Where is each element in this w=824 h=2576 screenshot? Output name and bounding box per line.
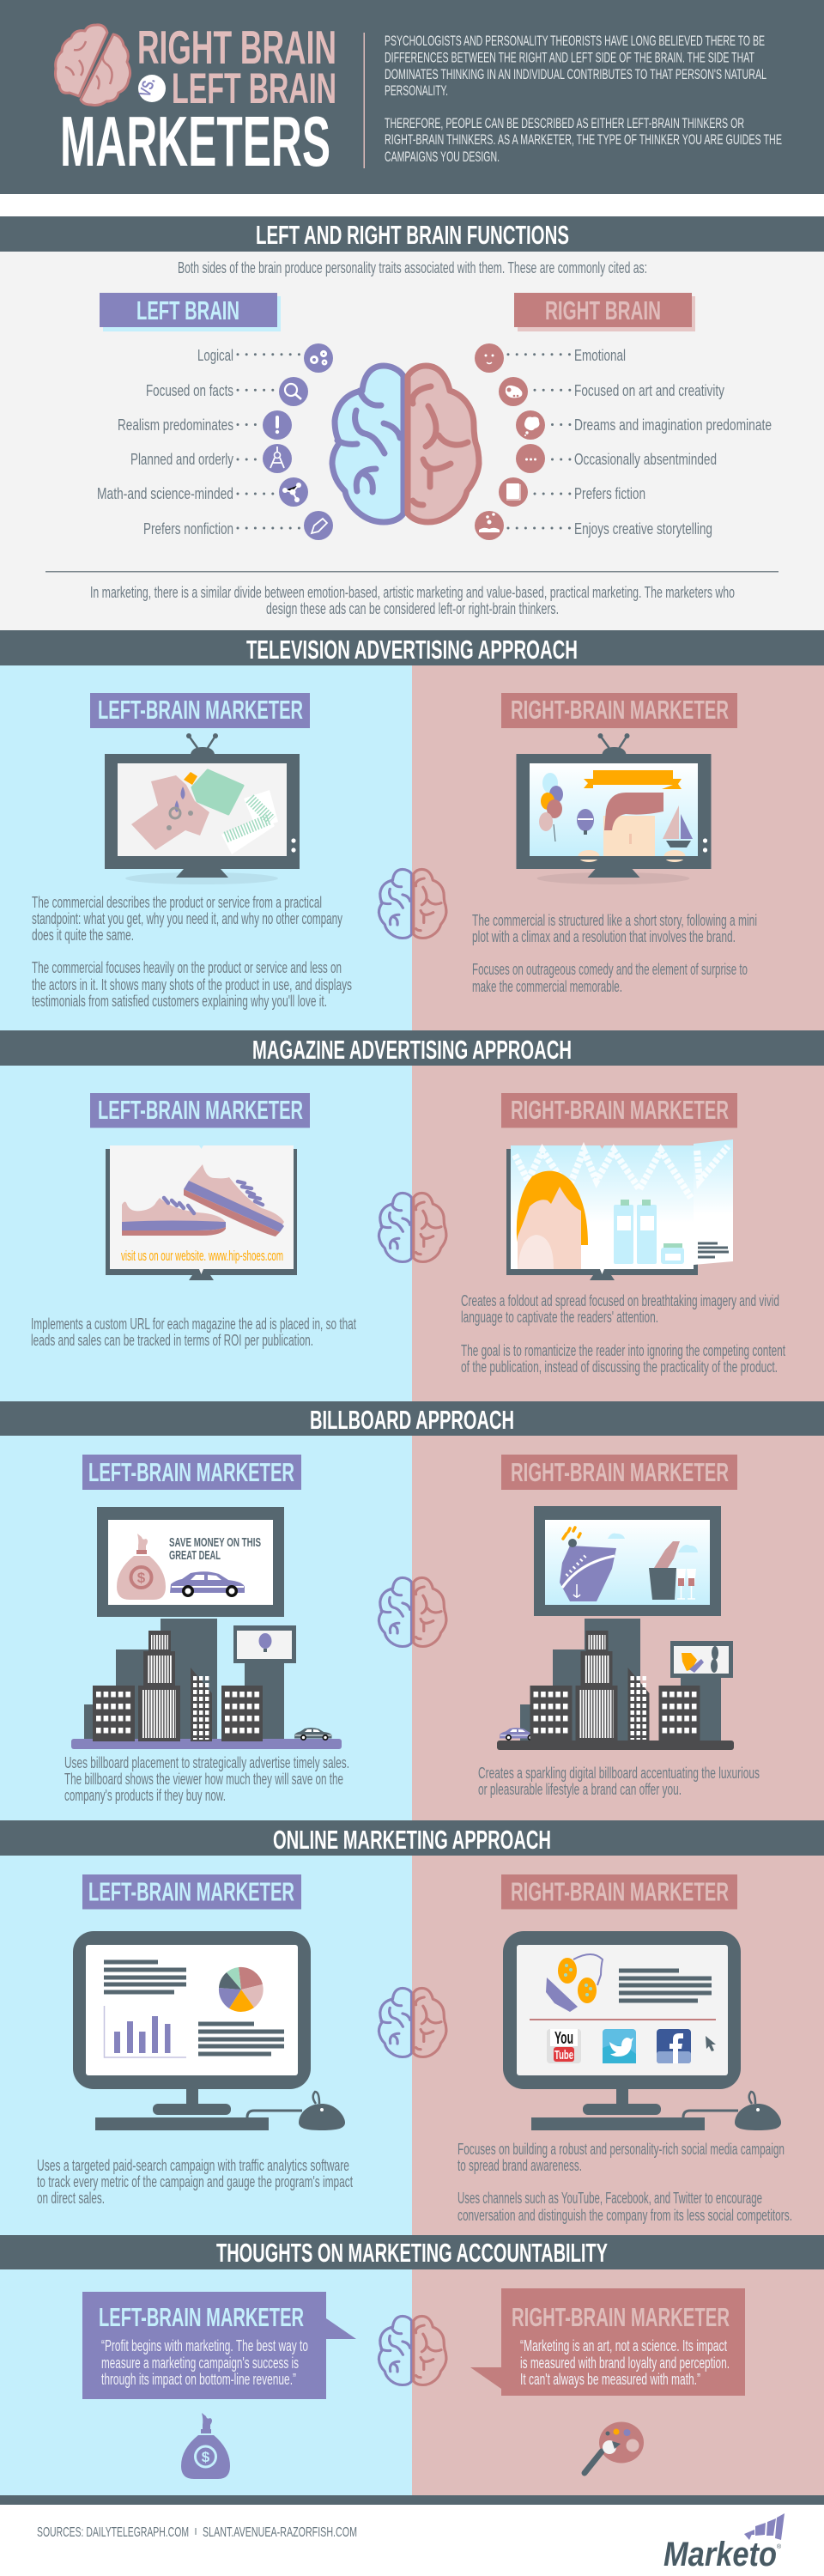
callout: left-brain quote: measure a marketing campaign's success is [101, 2354, 299, 2372]
closing text [90, 584, 735, 617]
right text: make the commercial memorable. [472, 978, 622, 995]
left text: Implements a custom URL for each magazine the ad is placed in, so that [31, 1315, 356, 1333]
label: left-brain marketer: LEFT-BRAIN MARKETER [88, 1457, 294, 1487]
bar chart [105, 2006, 186, 2057]
left text [37, 2157, 353, 2207]
left text: leads and sales can be tracked in terms of ROI per publication. [31, 1332, 313, 1349]
url: visit us on our website. www.hip-shoes.com [121, 1248, 283, 1264]
illustration: right tv [517, 733, 711, 884]
balloons [539, 773, 563, 841]
sources: SOURCES: DAILYTELEGRAPH.COM [37, 2525, 189, 2540]
title: left brain: LEFT BRAIN [172, 64, 336, 112]
billboard copy: GREAT DEAL [169, 1548, 221, 1563]
champagne [649, 1541, 696, 1600]
label: left-brain marketer [82, 1455, 301, 1490]
small car [294, 1728, 331, 1741]
small brain [379, 869, 446, 939]
intro text [385, 33, 782, 165]
icon: pencil [304, 511, 333, 540]
person [579, 793, 685, 862]
icon: open book [475, 511, 504, 540]
small brain [379, 1193, 446, 1262]
icon: thought cloud [516, 410, 545, 440]
panel backgrounds [0, 665, 824, 2495]
fold text lines [698, 1243, 729, 1257]
illustration: right city [497, 1619, 734, 1750]
left traits: Realism predominates [118, 416, 233, 434]
right text [461, 1292, 785, 1376]
price tag [192, 770, 243, 814]
callout: left-brain quote: LEFT-BRAIN MARKETER [99, 2302, 304, 2332]
small brain [379, 1988, 446, 2057]
label: right brain: RIGHT BRAIN [545, 295, 661, 325]
icon: smiley [475, 343, 504, 373]
icon: magnifier [279, 377, 308, 406]
woman [517, 1171, 588, 1269]
left traits: Prefers nonfiction [143, 520, 233, 538]
icon: youtube: Tube [554, 2048, 573, 2063]
right text: or pleasurable lifestyle a brand can offer you. [478, 1781, 682, 1798]
mask and ribbon [546, 1954, 603, 2012]
sailboat [663, 805, 693, 848]
left text: Uses billboard placement to strategically advertise timely sales. [64, 1754, 349, 1771]
label: left-brain marketer: LEFT-BRAIN MARKETER [98, 1095, 303, 1125]
icon: twitter [603, 2029, 636, 2063]
callout: right-brain quote [470, 2288, 745, 2396]
badge: vs [136, 75, 166, 102]
section: magazine [0, 1030, 824, 1376]
section: online [0, 1820, 824, 2224]
central brain [332, 366, 479, 522]
heading bar [0, 216, 824, 252]
hot air balloon [577, 809, 594, 835]
pie chart [219, 1967, 264, 2012]
icon: money bag [181, 2413, 230, 2479]
small brain [379, 2316, 446, 2385]
left text: does it quite the same. [32, 927, 134, 944]
left text: testimonials from satisfied customers explaining why you'll love it. [32, 993, 327, 1010]
money bag: $ [137, 1570, 146, 1586]
label: left-brain marketer: LEFT-BRAIN MARKETER [88, 1877, 294, 1906]
left text: The commercial focuses heavily on the product or service and less on [32, 959, 342, 976]
sources: SLANT.AVENUEA-RAZORFISH.COM [203, 2525, 357, 2540]
title: marketers: MARKETERS [60, 101, 330, 181]
receipts [221, 790, 278, 854]
label: right-brain marketer [501, 1093, 737, 1128]
callout: left-brain quote: through its impact on bottom-line revenue.” [101, 2371, 296, 2388]
label: left brain [100, 293, 281, 331]
icon: exclamation [263, 410, 292, 440]
t-shirt [131, 775, 209, 850]
icon: youtube: You [554, 2029, 573, 2048]
intro text: PERSONALITY. [385, 82, 448, 99]
heading bar: THOUGHTS ON MARKETING ACCOUNTABILITY [216, 2238, 608, 2268]
callout: right-brain quote: “Marketing is an art, not a science. Its impact [520, 2337, 727, 2354]
icon: pink brain [55, 25, 130, 106]
badge: vs: VS. [136, 76, 160, 100]
icon: compass [263, 444, 292, 473]
panel: header [0, 0, 824, 194]
illustration: left city [71, 1619, 342, 1749]
small brain [379, 1577, 446, 1647]
marketo logo [663, 2513, 785, 2573]
illustration: right computer [503, 1931, 781, 2130]
label: right brain [514, 293, 695, 331]
illustration: right billboard [534, 1506, 721, 1616]
label: left-brain marketer [90, 693, 310, 728]
right traits: Emotional [574, 347, 626, 364]
small car [500, 1728, 537, 1741]
illustration: left billboard [97, 1507, 284, 1617]
marketo logo: Marketo [663, 2536, 777, 2573]
callout: left-brain quote [82, 2292, 356, 2399]
icon: youtube [547, 2029, 581, 2063]
left text: The commercial describes the product or service from a practical [32, 894, 322, 911]
panel: brain functions [0, 216, 824, 630]
left text: the actors in it. It shows many shots of the product in use, and displays [32, 976, 352, 993]
label: left-brain marketer: LEFT-BRAIN MARKETER [98, 695, 303, 725]
left text [31, 1315, 356, 1349]
icon: palette [499, 377, 528, 406]
marketo logo: ® [777, 2543, 782, 2550]
footer [0, 2495, 824, 2573]
icon: cursor [706, 2036, 716, 2051]
banner [584, 770, 682, 789]
icon: book [499, 477, 528, 507]
callout: left-brain quote: “Profit begins with marketing. The best way to [101, 2337, 308, 2354]
label: right-brain marketer [501, 693, 737, 728]
cruise ship [560, 1528, 616, 1601]
right traits [574, 347, 772, 538]
right text: to spread brand awareness. [457, 2157, 582, 2174]
icon: network nodes [279, 477, 308, 507]
left text [32, 894, 352, 1010]
icon: palette and brush [585, 2421, 644, 2473]
billboard copy [169, 1535, 261, 1563]
right text [472, 912, 757, 995]
heading bar: ONLINE MARKETING APPROACH [273, 1825, 551, 1855]
text lines [104, 1962, 284, 2054]
icon: ellipsis [516, 444, 545, 473]
intro text: CAMPAIGNS YOU DESIGN. [385, 149, 500, 165]
left traits: Planned and orderly [130, 451, 233, 468]
left traits: Focused on facts [146, 382, 233, 399]
left text: The billboard shows the viewer how much they will save on the [64, 1771, 343, 1788]
label: right-brain marketer [501, 1455, 737, 1490]
callout: right-brain quote: It can't always be measured with math.” [520, 2371, 700, 2388]
icon: facebook [657, 2029, 691, 2063]
left text: Uses a targeted paid-search campaign with traffic analytics software [37, 2157, 349, 2174]
right text: language to captivate the readers' attention. [461, 1309, 658, 1326]
left text [64, 1754, 349, 1804]
left traits: Math-and science-minded [97, 485, 233, 502]
label: left-brain marketer [82, 1874, 301, 1910]
right text [478, 1765, 760, 1798]
bottles [614, 1200, 684, 1264]
icon: gears [304, 343, 333, 373]
small billboard [233, 1625, 296, 1663]
left text: to track every metric of the campaign and gauge the program's impact [37, 2173, 353, 2190]
label: left-brain marketer [90, 1093, 310, 1128]
right text [457, 2141, 792, 2224]
label: right-brain marketer [501, 1874, 737, 1910]
stains [167, 787, 193, 830]
heading bar: LEFT AND RIGHT BRAIN FUNCTIONS [256, 220, 569, 250]
billboard copy: SAVE MONEY ON THIS [169, 1535, 261, 1550]
heading bar: MAGAZINE ADVERTISING APPROACH [252, 1035, 572, 1065]
right traits: Enjoys creative storytelling [574, 520, 712, 538]
left text: standpoint: what you get, why you need it, and why no other company [32, 910, 342, 927]
left traits: Logical [197, 347, 233, 364]
illustration: left magazine [106, 1145, 297, 1280]
small billboard [670, 1641, 733, 1678]
heading bar [0, 630, 824, 665]
heading bar: BILLBOARD APPROACH [310, 1405, 514, 1435]
illustration: left tv [105, 733, 300, 884]
title: right brain: RIGHT BRAIN [137, 21, 336, 74]
left text: on direct sales. [37, 2190, 105, 2207]
car [170, 1571, 245, 1597]
illustration: left computer [73, 1931, 345, 2130]
clouds [608, 1534, 698, 1552]
section: television [0, 630, 824, 1010]
section: accountability [0, 2235, 824, 2479]
heading bar [0, 2235, 824, 2269]
label: left brain: LEFT BRAIN [136, 295, 239, 325]
heading bar: TELEVISION ADVERTISING APPROACH [246, 635, 578, 665]
left traits [97, 347, 571, 538]
right traits: Occasionally absentminded [574, 451, 717, 468]
diamonds [515, 1146, 728, 1198]
illustration: right magazine [506, 1139, 733, 1280]
right traits: Prefers fiction [574, 485, 645, 502]
left text: company's products if they buy now. [64, 1787, 226, 1804]
heading bar [0, 1820, 824, 1856]
closing text: design these ads can be considered left-or right-brain thinkers. [266, 600, 559, 617]
icon: money bag: $ [202, 2449, 210, 2465]
heading bar [0, 1030, 824, 1066]
section: billboard [0, 1401, 824, 1804]
heading bar [0, 1401, 824, 1436]
right traits: Focused on art and creativity [574, 382, 724, 399]
shoes [122, 1164, 284, 1236]
money bag [117, 1534, 166, 1600]
